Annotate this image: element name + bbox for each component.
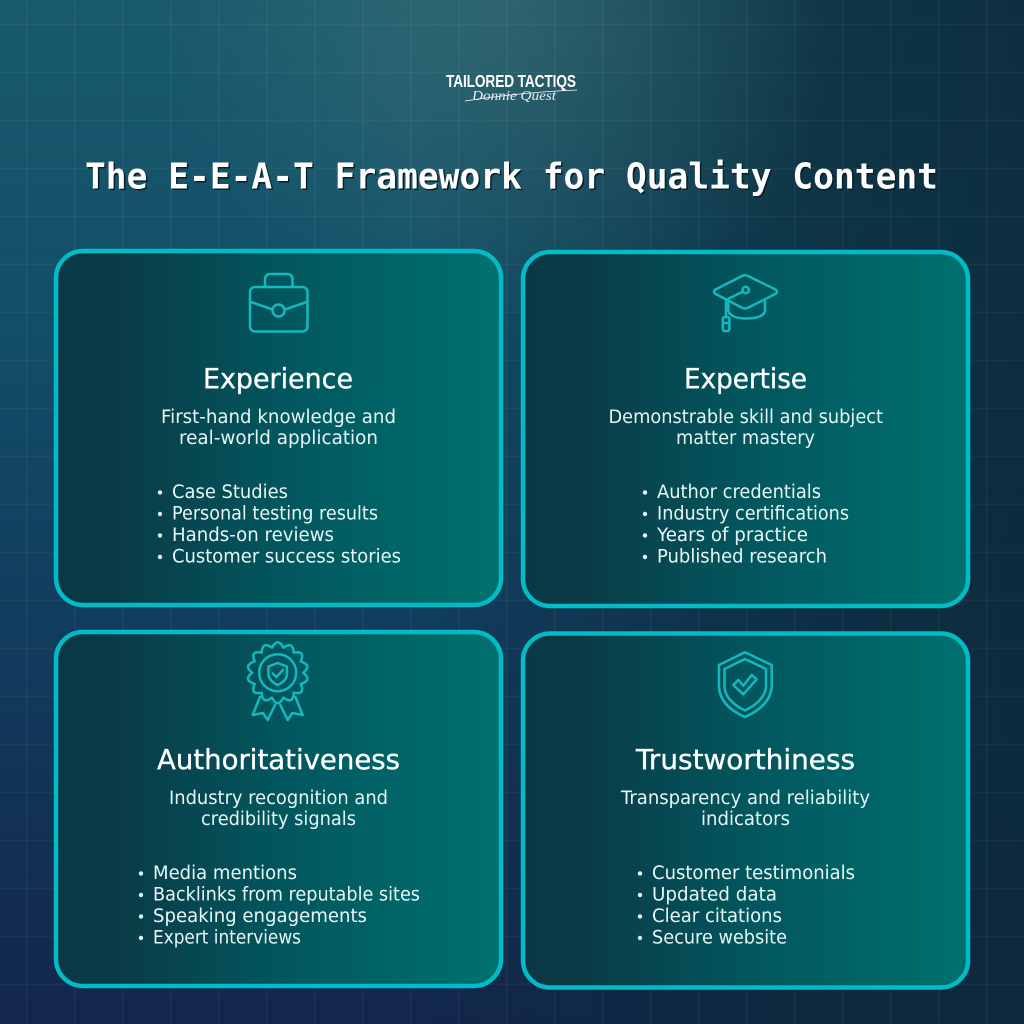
description: Expertise: [608, 407, 883, 449]
bullet list: Trustworthiness: Updated data: [652, 884, 777, 906]
bullet list: Authoritativeness: Speaking engagements: [153, 906, 367, 927]
icon: shield with check: [719, 652, 772, 717]
icon: award badge: [248, 642, 307, 720]
description: Trustworthiness: [620, 788, 870, 830]
heading: Expertise: Expertise: [684, 362, 807, 395]
icon: graduation cap: [714, 275, 777, 331]
bullet list: Experience: Personal testing results: [172, 504, 378, 524]
bullet list: Experience: [158, 482, 401, 568]
bullet list: Experience: Customer success stories: [172, 546, 401, 568]
panel: Authoritativeness: [56, 632, 501, 986]
bullet list: Experience: Hands-on reviews: [172, 525, 334, 546]
description: Authoritativeness: [169, 788, 388, 830]
logo: Tailored Tactiqs: Donnie Quest: [471, 89, 557, 104]
description: Expertise: Demonstrable skill and subject: [608, 407, 883, 428]
panel: Trustworthiness: [523, 634, 968, 988]
panel: Expertise: [523, 252, 968, 606]
heading: Authoritativeness: Authoritativeness: [157, 743, 400, 776]
bullet list: Trustworthiness: Clear citations: [652, 906, 782, 927]
description: Trustworthiness: Transparency and reliability: [620, 788, 870, 809]
bullet list: Expertise: Author credentials: [657, 482, 821, 503]
bullet list: Expertise: [643, 482, 849, 568]
icon: briefcase: [250, 274, 308, 332]
heading: Trustworthiness: Trustworthiness: [635, 743, 855, 776]
title: The E-E-A-T Framework for Quality Content: [86, 158, 940, 199]
bullet list: Authoritativeness: Expert interviews: [153, 928, 301, 948]
heading: Experience: Experience: [203, 362, 353, 395]
bullet list: Authoritativeness: Backlinks from reputable sites: [153, 884, 420, 906]
bullet list: Trustworthiness: Customer testimonials: [652, 863, 855, 884]
description: Experience: First-hand knowledge and: [161, 407, 396, 428]
bullet list: Expertise: Published research: [657, 546, 827, 568]
description: Experience: real-world application: [179, 428, 378, 449]
logo: Tailored Tactiqs: [446, 72, 577, 104]
description: Authoritativeness: Industry recognition and: [169, 788, 388, 809]
bullet list: Authoritativeness: Media mentions: [153, 863, 297, 884]
description: Trustworthiness: indicators: [701, 809, 790, 830]
logo: Tailored Tactiqs: TAILORED TACTIQS: [446, 72, 576, 92]
description: Expertise: matter mastery: [676, 428, 815, 449]
description: Experience: [161, 407, 396, 449]
panel: Experience: [56, 251, 501, 605]
bullet list: Authoritativeness: [139, 863, 420, 948]
bullet list: Trustworthiness: Secure website: [652, 928, 787, 948]
bullet list: Expertise: Industry certifications: [657, 504, 849, 524]
description: Authoritativeness: credibility signals: [201, 809, 356, 830]
title: The E-E-A-T Framework for Quality Content: [85, 156, 938, 198]
bullet list: Trustworthiness: [638, 863, 855, 948]
bullet list: Expertise: Years of practice: [656, 525, 808, 546]
bullet list: Experience: Case Studies: [172, 482, 288, 503]
